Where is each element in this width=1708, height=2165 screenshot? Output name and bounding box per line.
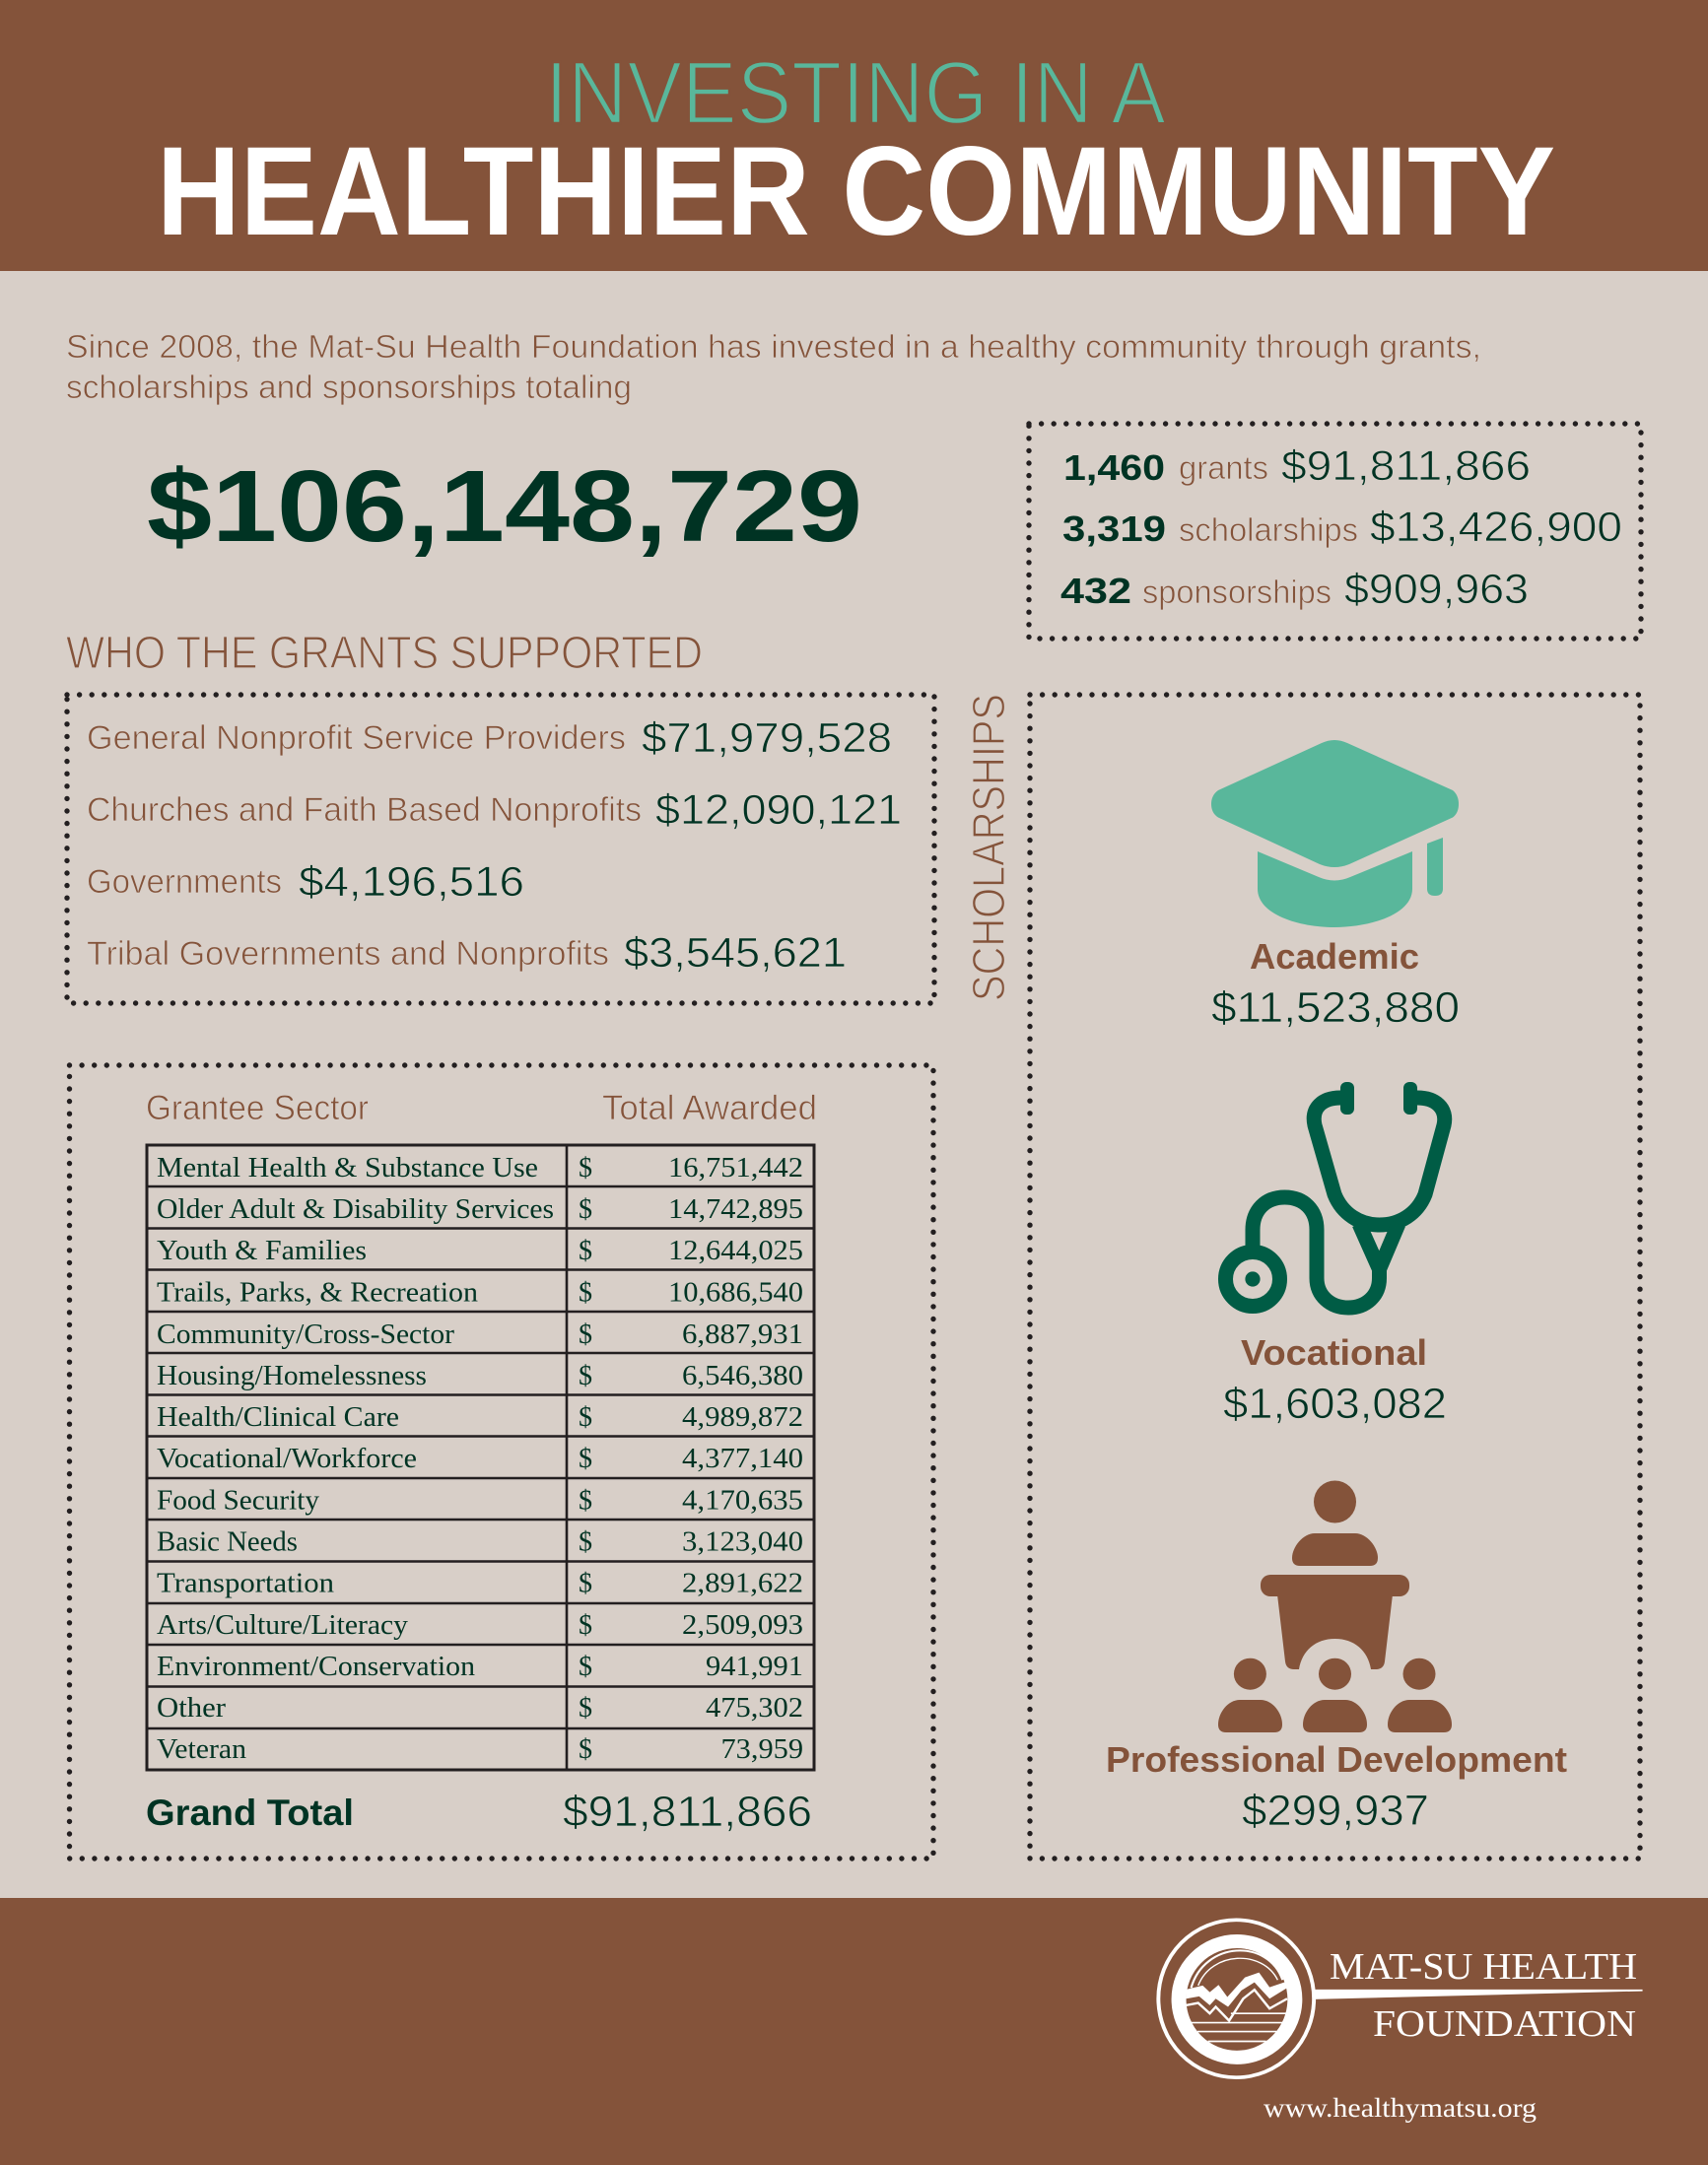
recipient: governments: $4,196,516: [299, 858, 524, 906]
table amounts: 2,891,622: [682, 1567, 803, 1598]
recipient: tribal: [87, 929, 847, 977]
table sector names: Veteran: [157, 1733, 247, 1765]
icon: presenter and audience: [1218, 1480, 1452, 1732]
logo wordmark: [1330, 1946, 1637, 2045]
panel: who the grants supported: [67, 695, 934, 1003]
icon: graduation cap: [1211, 740, 1459, 927]
table sector names: Food Security: [157, 1484, 319, 1516]
table dollar signs: $: [579, 1319, 592, 1350]
table sector names: Health/Clinical Care: [157, 1401, 399, 1433]
table amounts: 475,302: [706, 1692, 803, 1724]
table sector names: Transportation: [157, 1567, 335, 1598]
table dollar signs: $: [579, 1402, 592, 1433]
title line: healthier community: HEALTHIER COMMUNITY: [157, 121, 1555, 262]
intro text: Since 2008, the Mat-Su Health Foundation has invested in a healthy community through grants,: [66, 328, 1481, 365]
recipient: general nonprofit: General Nonprofit Service Providers: [87, 719, 626, 757]
recipient: tribal: $3,545,621: [624, 929, 847, 977]
table amounts: 4,170,635: [682, 1484, 803, 1516]
grand total row: $91,811,866: [563, 1788, 812, 1836]
grand total row: [146, 1788, 812, 1836]
table dollar signs: $: [579, 1734, 592, 1765]
scholarships row: 3,319: [1062, 508, 1166, 549]
table headers: Total Awarded: [602, 1089, 817, 1127]
table sector names: Basic Needs: [157, 1525, 298, 1557]
label: academic: $11,523,880: [1211, 983, 1460, 1032]
table dollar signs: $: [579, 1277, 592, 1309]
table dollar signs: $: [579, 1527, 592, 1557]
table amounts: [668, 1152, 803, 1765]
table sector names: Vocational/Workforce: [157, 1443, 417, 1474]
recipient: governments: [87, 858, 524, 906]
table amounts: 12,644,025: [668, 1235, 803, 1266]
table amounts: 4,989,872: [682, 1401, 803, 1433]
table sector names: [157, 1152, 554, 1765]
recipient: governments: Governments: [87, 863, 282, 901]
scholarships row: [1062, 504, 1622, 551]
intro text: scholarships and sponsorships totaling: [66, 369, 632, 405]
table amounts: 10,686,540: [668, 1277, 803, 1309]
panel: grantee sector table: [69, 1065, 933, 1859]
recipient: churches: Churches and Faith Based Nonprofits: [87, 791, 642, 829]
table sector names: Youth & Families: [157, 1235, 367, 1266]
table dollar signs: $: [579, 1444, 592, 1474]
label: academic: [1211, 936, 1460, 1032]
recipient: tribal: Tribal Governments and Nonprofits: [87, 935, 609, 973]
sponsorships row: sponsorships: [1142, 574, 1332, 610]
recipient: general nonprofit: $71,979,528: [642, 714, 892, 762]
grants row: $91,811,866: [1281, 442, 1531, 490]
logo wordmark: FOUNDATION: [1373, 2003, 1636, 2045]
table headers: [146, 1089, 817, 1127]
recipient: general nonprofit: [87, 714, 892, 762]
logo emblem: [1158, 1920, 1643, 2077]
table amounts: 73,959: [721, 1733, 803, 1765]
table dollar signs: $: [579, 1610, 592, 1641]
header band with title: [0, 0, 1708, 271]
grants row: grants: [1179, 449, 1268, 486]
table headers: Grantee Sector: [146, 1089, 369, 1127]
table sector names: Arts/Culture/Literacy: [157, 1609, 408, 1641]
label: academic: Academic: [1250, 936, 1419, 977]
table grid: [147, 1145, 814, 1770]
sponsorships row: 432: [1060, 571, 1131, 611]
table dollar signs: $: [579, 1486, 592, 1516]
recipient: churches: $12,090,121: [655, 786, 902, 834]
panel: funding summary: [1029, 424, 1641, 639]
heading: who the grants supported: WHO THE GRANTS SUPPORTED: [66, 627, 703, 678]
table sector names: Environment/Conservation: [157, 1651, 476, 1682]
scholarships row: $13,426,900: [1370, 504, 1622, 551]
table amounts: 6,887,931: [682, 1319, 803, 1350]
panel: scholarships: [1030, 695, 1640, 1859]
label: vocational: [1223, 1332, 1447, 1428]
label: professional development: [1106, 1739, 1567, 1835]
sponsorships row: $909,963: [1344, 566, 1529, 613]
table dollar signs: $: [579, 1569, 592, 1598]
table dollar signs: $: [579, 1153, 592, 1184]
table dollar signs: $: [579, 1652, 592, 1682]
table dollar signs: [579, 1153, 592, 1765]
table sector names: Housing/Homelessness: [157, 1360, 427, 1391]
scholarships row: scholarships: [1179, 511, 1358, 548]
label: vocational: $1,603,082: [1223, 1380, 1447, 1428]
table amounts: 6,546,380: [682, 1360, 803, 1391]
intro text: [66, 328, 1481, 405]
label: professional development: $299,937: [1242, 1787, 1429, 1835]
heading: scholarships vertical: SCHOLARSHIPS: [963, 694, 1014, 1001]
table dollar signs: $: [579, 1361, 592, 1391]
table sector names: Community/Cross-Sector: [157, 1319, 454, 1350]
table amounts: 941,991: [706, 1651, 803, 1682]
table sector names: Other: [157, 1692, 226, 1724]
grand total amount: $106,148,729: [147, 449, 862, 563]
icon: stethoscope: [1226, 1082, 1445, 1308]
logo wordmark: MAT-SU HEALTH: [1330, 1946, 1637, 1988]
grants row: [1063, 442, 1531, 490]
table amounts: 2,509,093: [682, 1609, 803, 1641]
sponsorships row: [1060, 566, 1529, 613]
table amounts: 16,751,442: [668, 1152, 803, 1184]
table amounts: 4,377,140: [682, 1443, 803, 1474]
website url: www.healthymatsu.org: [1264, 2093, 1537, 2123]
table sector names: Older Adult & Disability Services: [157, 1193, 554, 1225]
grants row: 1,460: [1063, 447, 1165, 488]
table amounts: 14,742,895: [668, 1193, 803, 1225]
table dollar signs: $: [579, 1194, 592, 1225]
grand total row: Grand Total: [146, 1793, 354, 1833]
table sector names: Mental Health & Substance Use: [157, 1152, 538, 1184]
recipient: churches: [87, 786, 902, 834]
table dollar signs: $: [579, 1693, 592, 1724]
title line: investing in a: INVESTING IN A: [545, 44, 1166, 143]
table dollar signs: $: [579, 1236, 592, 1266]
label: vocational: Vocational: [1241, 1332, 1427, 1373]
label: professional development: Professional Development: [1106, 1739, 1567, 1780]
table amounts: 3,123,040: [682, 1525, 803, 1557]
table sector names: Trails, Parks, & Recreation: [157, 1277, 479, 1309]
footer band: [0, 1898, 1708, 2165]
